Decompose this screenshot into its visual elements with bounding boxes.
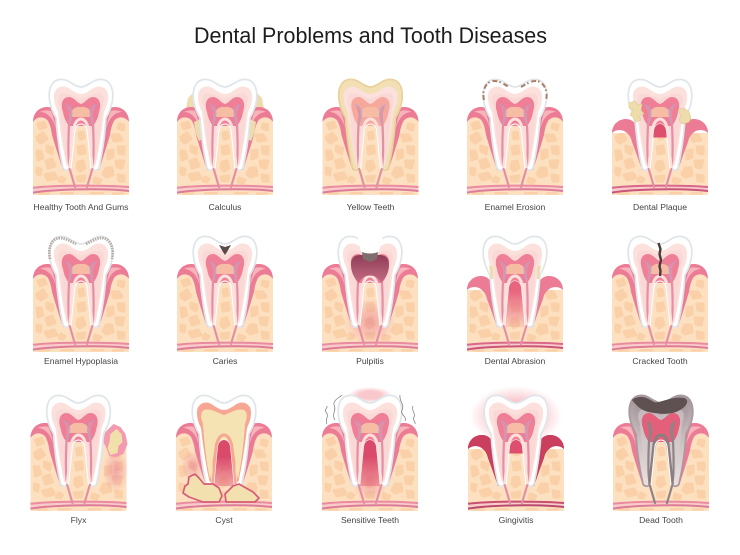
icon: inflamed arch (214, 440, 234, 486)
label: dead tooth: Dead Tooth (639, 515, 683, 525)
panel: cracked tooth (612, 236, 708, 366)
panel: enamel hypoplasia (33, 236, 129, 366)
panel: calculus (177, 79, 273, 212)
panel: healthy tooth and gums (33, 79, 129, 212)
icon: worn neck (489, 265, 541, 279)
panel: pulpitis (322, 235, 418, 366)
label: dental abrasion: Dental Abrasion (485, 356, 546, 366)
label: cyst: Cyst (215, 515, 233, 525)
icon: necrotic top (632, 397, 687, 414)
label: calculus: Calculus (209, 202, 241, 212)
icon: pitted enamel (49, 238, 113, 259)
label: sensitive teeth: Sensitive Teeth (341, 515, 399, 525)
icon: inflammation glow (470, 386, 562, 446)
icon: inflamed arch (505, 281, 525, 327)
label: flyx: Flyx (71, 515, 87, 525)
icon: crack (658, 243, 661, 276)
icon: eroded enamel (483, 81, 547, 100)
panel: cyst (176, 395, 272, 525)
icon: dark pulp chamber (351, 255, 389, 283)
panel: gingivitis (465, 386, 567, 525)
icon: abscess on gum (102, 424, 128, 457)
icon: inflamed canal space (360, 440, 380, 486)
panel: yellow teeth (322, 79, 418, 212)
icon: red bone glow (102, 449, 128, 493)
icon: inflamed arch (506, 440, 526, 486)
icon: inflamed arch (650, 124, 670, 170)
icon: tartar above gums (186, 90, 264, 112)
panel: enamel erosion (467, 79, 563, 212)
title: Dental Problems and Tooth Diseases (194, 23, 547, 48)
icon: red bone glow (181, 450, 205, 482)
icon: crown glow (348, 387, 392, 403)
icon: caries cavity (219, 245, 231, 255)
panel: caries (177, 236, 273, 366)
label: yellow teeth: Yellow Teeth (347, 202, 395, 212)
panel: dental plaque (609, 79, 711, 212)
label: healthy tooth: Healthy Tooth And Gums (34, 202, 128, 212)
icon: deep cavity (357, 235, 383, 255)
panel: sensitive teeth (322, 387, 418, 525)
panel: dental abrasion (464, 236, 566, 366)
panel: dead tooth (613, 395, 709, 525)
label: dental plaque: Dental Plaque (633, 202, 687, 212)
label: caries: Caries (213, 356, 237, 366)
panel: flyx (30, 395, 128, 525)
icon: red bone glow (352, 459, 388, 503)
icon: inflammation below tooth (344, 298, 396, 346)
icon: tartar below gums (194, 118, 256, 141)
icon: cyst at root base (183, 474, 259, 502)
label: gingivitis: Gingivitis (499, 515, 533, 525)
label: enamel hypoplasia: Enamel Hypoplasia (44, 356, 118, 366)
label: enamel erosion: Enamel Erosion (485, 202, 546, 212)
icon: plaque clusters (629, 101, 691, 124)
label: pulpitis: Pulpitis (356, 356, 384, 366)
label: cracked tooth: Cracked Tooth (632, 356, 688, 366)
icon: pain squiggles (325, 395, 415, 424)
